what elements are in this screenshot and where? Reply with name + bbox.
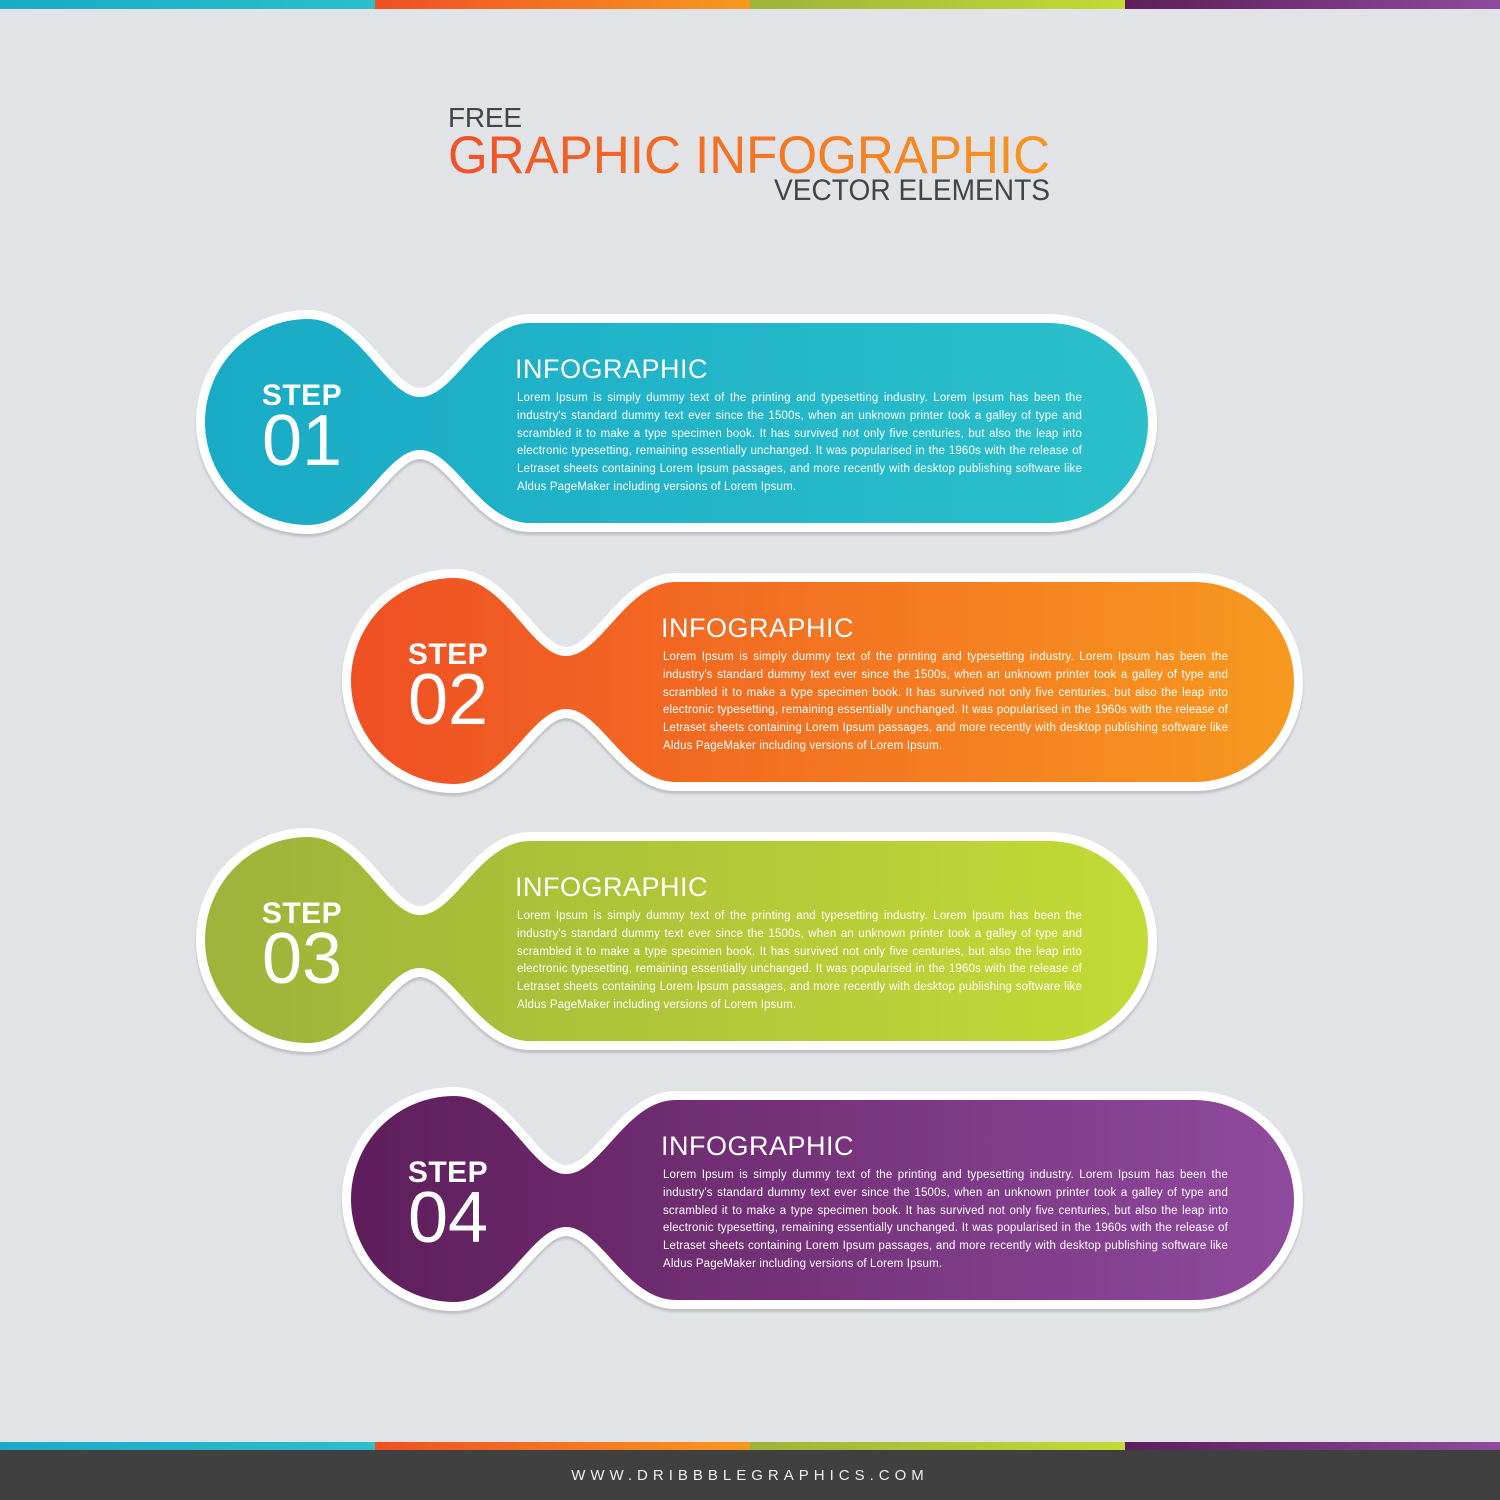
footer (0, 1442, 1500, 1500)
title: GRAPHIC INFOGRAPHIC (448, 126, 1050, 185)
step 03: INFOGRAPHIC (515, 872, 708, 902)
footer url: WWW.DRIBBBLEGRAPHICS.COM (571, 1467, 929, 1484)
step 04: 04 (408, 1178, 488, 1258)
step 02 (341, 569, 1304, 797)
title: FREE (448, 102, 522, 133)
title (448, 102, 1050, 207)
step 01: 01 (262, 401, 342, 481)
step 02: 02 (408, 660, 488, 740)
step 01: STEP (262, 379, 342, 412)
step 03: 03 (262, 919, 342, 999)
step 03: STEP (262, 897, 342, 930)
step 03 (195, 828, 1158, 1056)
step 01: Lorem Ipsum is simply dummy text of the printing and typesetting industry. Lorem Ipsum has been the industry's standard dummy text ever since the 1500s, when an unknown printer took a galley of type and scrambled it to make a type specimen book. It has survived not only five centuries, but also the leap into electronic typesetting, remaining essentially unchanged. It was popularised in the 1960s with the release of Letraset sheets containing Lorem Ipsum passages, and more recently with desktop publishing software like Aldus PageMaker including versions of Lorem Ipsum. (517, 392, 1082, 493)
step 02: INFOGRAPHIC (661, 613, 854, 643)
top color bar (0, 0, 1500, 9)
step 04 (341, 1087, 1304, 1315)
step 02: STEP (408, 638, 488, 671)
step 02: Lorem Ipsum is simply dummy text of the printing and typesetting industry. Lorem Ipsum has been the industry's standard dummy text ever since the 1500s, when an unknown printer took a galley of type and scrambled it to make a type specimen book. It has survived not only five centuries, but also the leap into electronic typesetting, remaining essentially unchanged. It was popularised in the 1960s with the release of Letraset sheets containing Lorem Ipsum passages, and more recently with desktop publishing software like Aldus PageMaker including versions of Lorem Ipsum. (663, 651, 1228, 752)
step 01 (195, 310, 1158, 538)
step 04: STEP (408, 1156, 488, 1189)
step 03: Lorem Ipsum is simply dummy text of the printing and typesetting industry. Lorem Ipsum has been the industry's standard dummy text ever since the 1500s, when an unknown printer took a galley of type and scrambled it to make a type specimen book. It has survived not only five centuries, but also the leap into electronic typesetting, remaining essentially unchanged. It was popularised in the 1960s with the release of Letraset sheets containing Lorem Ipsum passages, and more recently with desktop publishing software like Aldus PageMaker including versions of Lorem Ipsum. (517, 910, 1082, 1011)
title: VECTOR ELEMENTS (774, 174, 1050, 207)
step 04: INFOGRAPHIC (661, 1131, 854, 1161)
step 01: INFOGRAPHIC (515, 354, 708, 384)
step 04: Lorem Ipsum is simply dummy text of the printing and typesetting industry. Lorem Ipsum has been the industry's standard dummy text ever since the 1500s, when an unknown printer took a galley of type and scrambled it to make a type specimen book. It has survived not only five centuries, but also the leap into electronic typesetting, remaining essentially unchanged. It was popularised in the 1960s with the release of Letraset sheets containing Lorem Ipsum passages, and more recently with desktop publishing software like Aldus PageMaker including versions of Lorem Ipsum. (663, 1169, 1228, 1270)
